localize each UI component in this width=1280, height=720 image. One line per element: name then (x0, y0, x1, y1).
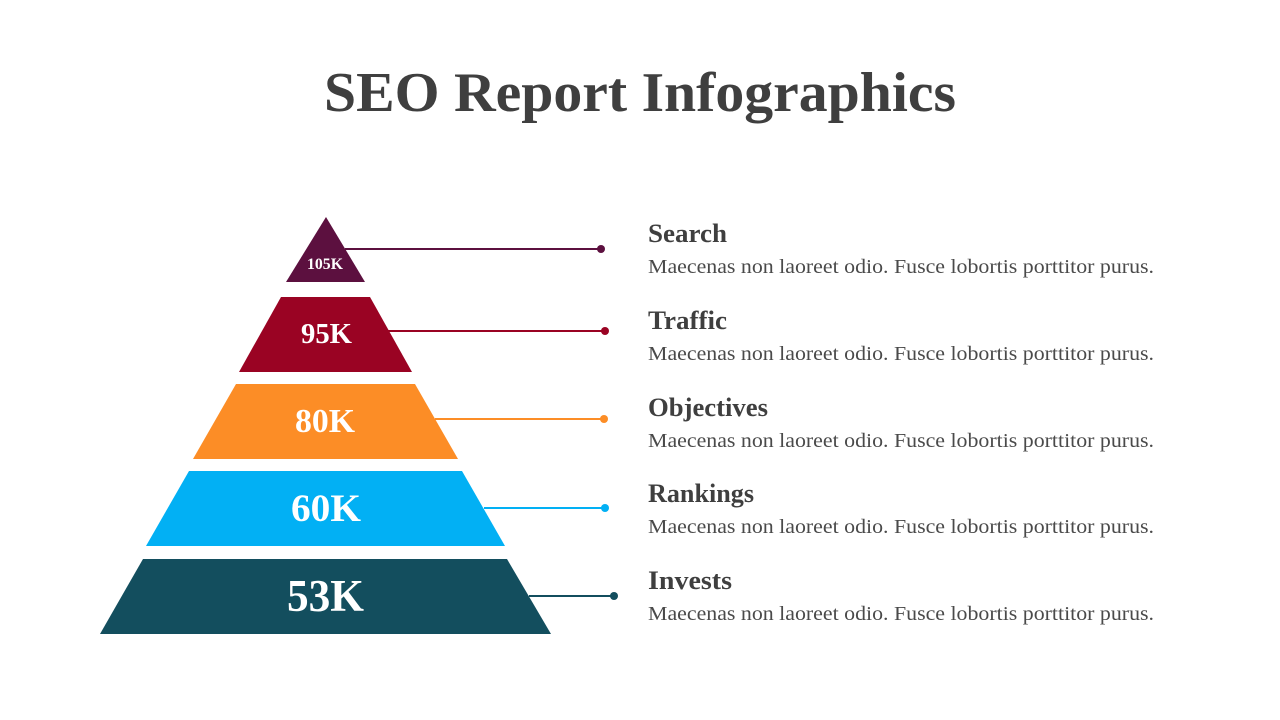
text block: Rankings: Maecenas non laoreet odio. Fusce lobortis porttitor purus. (648, 516, 1154, 538)
connector: Traffic (388, 327, 609, 335)
text block: Traffic (648, 306, 1154, 365)
pyramid tier: 60K: 60K (291, 487, 362, 530)
pyramid tier: 53K (100, 559, 551, 634)
pyramid tier: 95K: 95K (301, 319, 352, 350)
text block: Search: Maecenas non laoreet odio. Fusce lobortis porttitor purus. (648, 256, 1154, 278)
pyramid tier: 105K (286, 217, 365, 282)
text block: Objectives: Objectives (648, 393, 768, 422)
text block: Rankings: Rankings (648, 479, 754, 508)
text block: Invests: Invests (648, 566, 732, 595)
title: SEO Report Infographics (324, 62, 956, 124)
text block: Invests (648, 566, 1154, 625)
pyramid tier: 80K (193, 384, 458, 459)
pyramid chart (100, 217, 551, 634)
text block: Search (648, 219, 1154, 278)
connector: Invests (529, 592, 618, 600)
connector: Search (345, 245, 605, 253)
text block: Traffic: Maecenas non laoreet odio. Fusce lobortis porttitor purus. (648, 343, 1154, 365)
text block: Traffic: Traffic (648, 306, 727, 335)
pyramid tier: 105K: 105K (307, 256, 344, 273)
connector: Objectives (435, 415, 608, 423)
text block: Objectives (648, 393, 1154, 452)
text block: Rankings (648, 479, 1154, 538)
pyramid tier: 95K (239, 297, 412, 372)
text block: Search: Search (648, 219, 728, 248)
connector: Rankings (484, 504, 609, 512)
text block: Invests: Maecenas non laoreet odio. Fusce lobortis porttitor purus. (648, 603, 1154, 625)
pyramid tier: 60K (146, 471, 505, 546)
text block: Objectives: Maecenas non laoreet odio. Fusce lobortis porttitor purus. (648, 430, 1154, 452)
pyramid tier: 53K: 53K (287, 571, 364, 621)
pyramid tier: 80K: 80K (295, 403, 356, 440)
